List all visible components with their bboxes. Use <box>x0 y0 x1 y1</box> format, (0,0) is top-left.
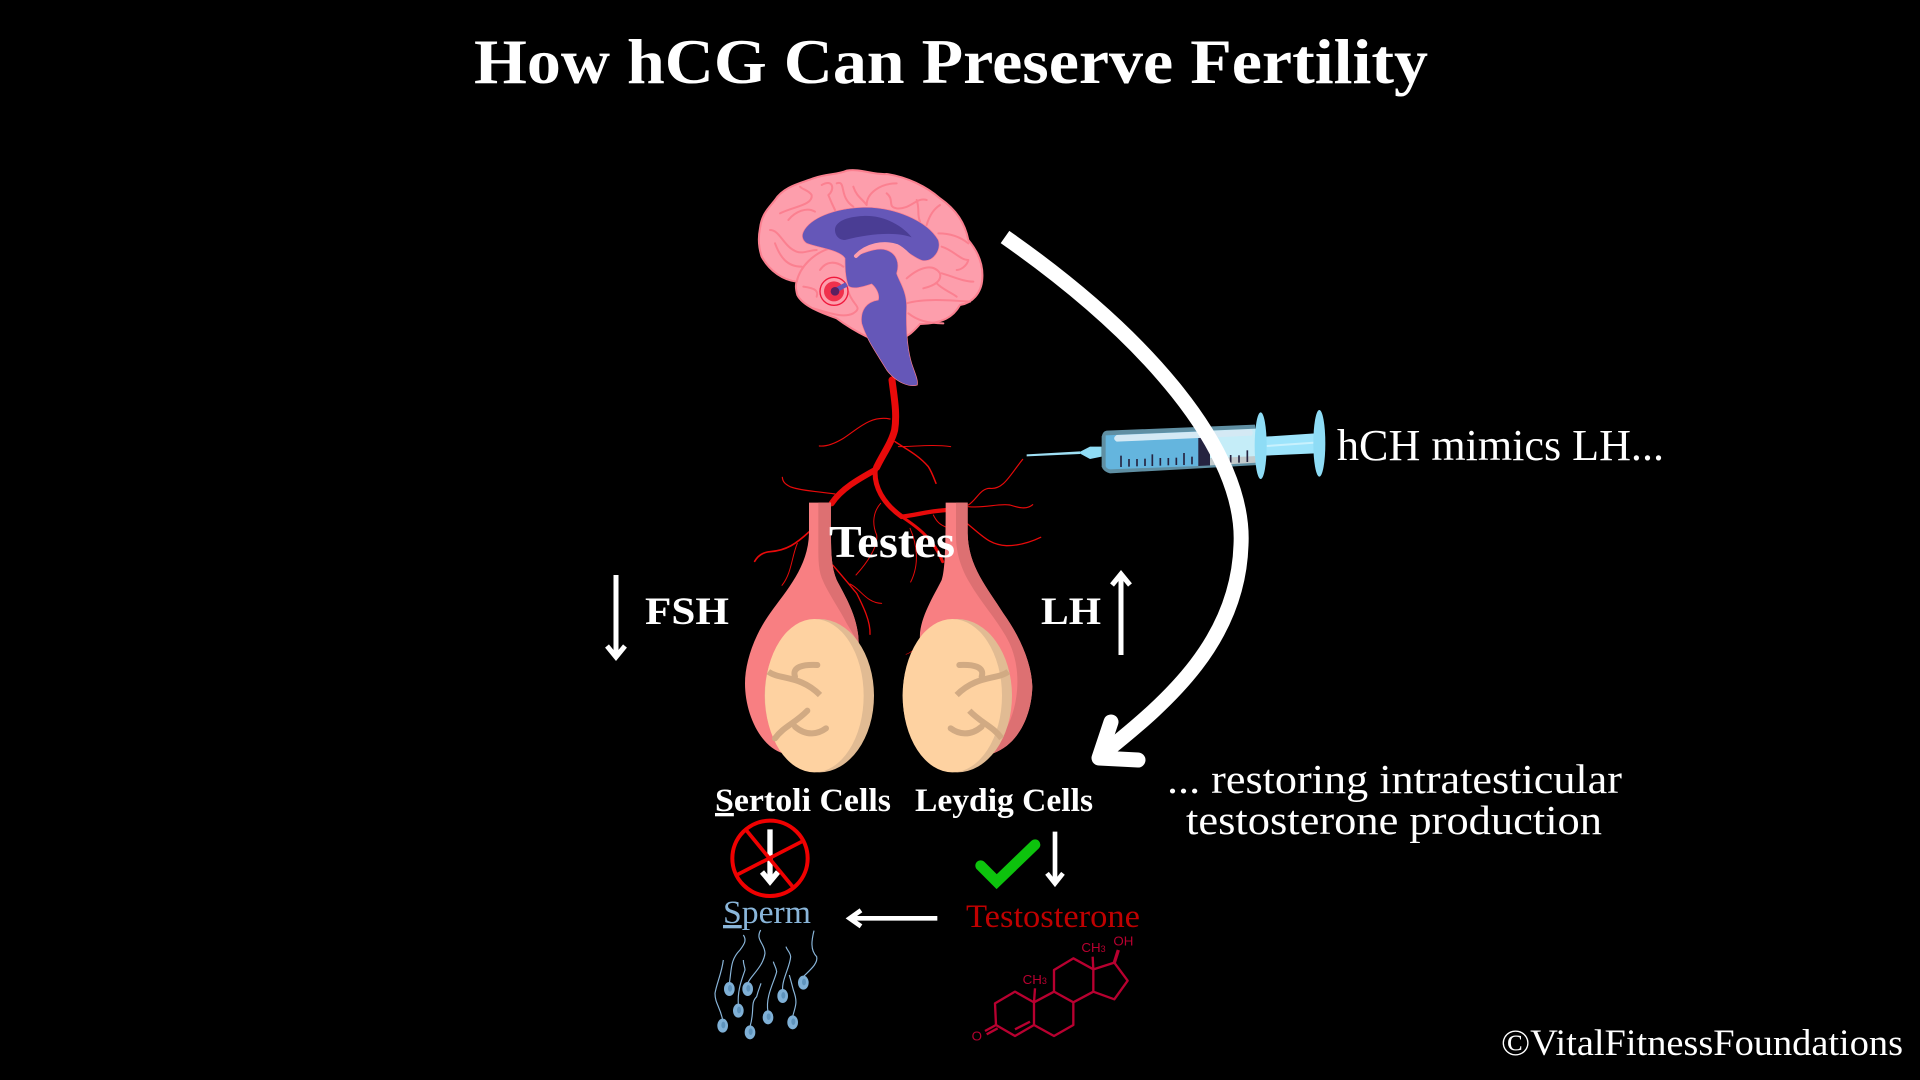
chart: testosterone molecule: CH3 <box>1081 940 1106 955</box>
icon: syringe <box>1027 410 1325 479</box>
label: Sperm: Sperm <box>723 895 811 931</box>
icon: green check <box>981 845 1035 882</box>
arrow: FSH down <box>607 575 625 657</box>
chart: testosterone molecule: OH <box>1113 933 1133 948</box>
arrow: testosterone to sperm <box>850 910 937 926</box>
label: restoring testosterone <box>1167 756 1622 843</box>
icon: right testis <box>903 503 1032 772</box>
blood vessels <box>755 380 1041 654</box>
arrow: hCG curved arrow to Leydig cells <box>1005 237 1241 760</box>
chart: testosterone molecule: O <box>972 1028 982 1043</box>
copyright: ©VitalFitnessFoundations <box>1501 1023 1903 1064</box>
icon: left testis <box>745 503 874 772</box>
chart: testosterone molecule <box>972 933 1133 1043</box>
label: LH: LH <box>1041 590 1101 633</box>
chart: testosterone molecule: CH3 <box>1023 972 1047 987</box>
label: restoring testosterone: ... restoring intratesticular <box>1167 756 1622 802</box>
label: Leydig Cells: Leydig Cells <box>915 783 1093 819</box>
title: How hCG Can Preserve Fertility <box>474 27 1428 97</box>
label: Testes: Testes <box>829 517 955 567</box>
icon: pituitary target <box>820 277 848 305</box>
label: restoring testosterone: testosterone production <box>1186 797 1602 843</box>
label: Sertoli Cells: Sertoli Cells <box>715 783 891 819</box>
label: FSH: FSH <box>645 590 729 633</box>
arrow: Leydig to testosterone <box>1047 832 1063 883</box>
icon: brain <box>759 170 982 386</box>
arrow: LH up <box>1112 574 1130 655</box>
label: Testosterone: Testosterone <box>966 899 1140 935</box>
icon: blocked arrow <box>732 821 808 896</box>
icon: sperm cluster <box>715 930 817 1039</box>
label: hCH mimics LH: hCH mimics LH... <box>1337 421 1664 470</box>
